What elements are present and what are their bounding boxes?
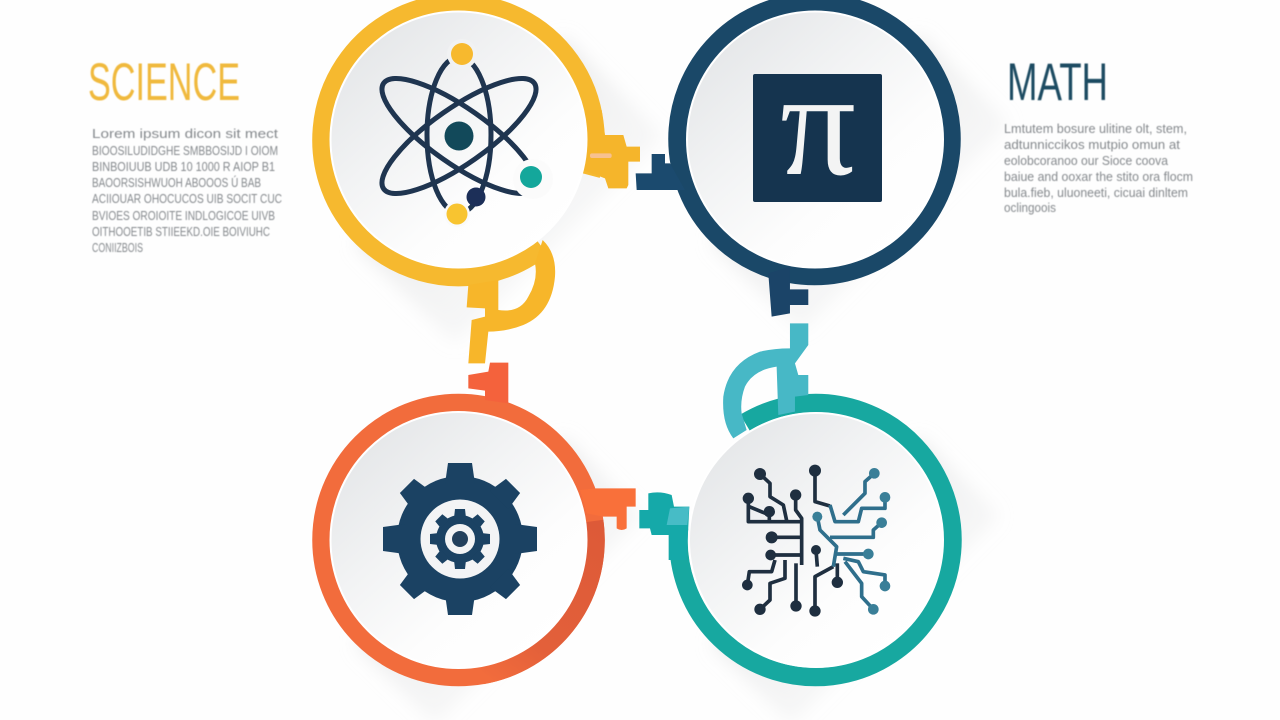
text block: science description: ACIIOUAR OHOCUCOS UIB SOCIT CUC xyxy=(92,192,282,206)
teal open ring xyxy=(678,403,952,677)
heading: science: SCIENCE xyxy=(88,53,240,112)
white disc xyxy=(330,12,586,268)
navy ring xyxy=(678,2,952,276)
icon: pi square: π xyxy=(780,41,856,207)
panel: engineering circle xyxy=(322,363,636,677)
text block: science description: OITHOOETIB STIIEEKD.OIE BOIVIUHC xyxy=(92,225,270,239)
text block: math description: eolobcoranoo our Sioce coova xyxy=(1004,154,1168,168)
text block: science description xyxy=(92,127,282,255)
text block: science description: CONIIZBOIS xyxy=(92,241,143,255)
panel: science circle xyxy=(321,3,640,363)
long shadows behind circles xyxy=(355,34,1009,720)
text block: science description: BAOORSISHWUOH ABOOOS Ú BAB xyxy=(92,175,261,190)
icon: circuit brain xyxy=(742,465,890,617)
text block: science description: BIOOSILUDIDGHE SMBBOSIJD I OIOM xyxy=(92,144,278,158)
text block: science description: Lorem ipsum dicon sit mect xyxy=(92,127,279,141)
white disc xyxy=(330,412,586,668)
orange top connector xyxy=(468,363,508,403)
text block: math description: adtunniccikos mutpio omun at xyxy=(1004,138,1181,152)
panel: math circle xyxy=(636,2,952,317)
icon: atom xyxy=(368,39,553,227)
text block: math description xyxy=(1004,122,1193,215)
icon: pi square xyxy=(753,41,882,207)
text block: math description: Lmtutem bosure ulitine olt, stem, xyxy=(1004,122,1187,136)
text block: math description: bula.fieb, uluoneeti, cicuai dinltem xyxy=(1004,186,1188,200)
orange right connector xyxy=(580,488,636,530)
navy bottom connector xyxy=(768,267,808,317)
text block: science description: BVIOES OROIOITE INDLOGICOE UIVB xyxy=(92,209,275,223)
text block: math description: baiue and ooxar the stito ora flocm xyxy=(1004,170,1193,184)
icon: gear xyxy=(383,463,537,615)
orange ring darker lower arc xyxy=(482,521,596,675)
white disc xyxy=(687,12,943,268)
light teal top hook connector xyxy=(723,323,808,438)
heading: math: MATH xyxy=(1007,53,1108,112)
white disc xyxy=(689,413,943,667)
yellow bottom hook connector xyxy=(467,240,555,363)
teal left connector xyxy=(639,492,689,560)
yellow right connector xyxy=(583,110,640,188)
text block: math description: oclingoois xyxy=(1004,201,1056,215)
panel: technology circle xyxy=(639,323,952,677)
yellow open ring xyxy=(321,3,595,277)
orange ring xyxy=(322,403,596,677)
navy left connector xyxy=(636,154,685,190)
text block: science description: BINBOIUUB UDB 10 1000 R AIOP B1 xyxy=(92,160,275,174)
